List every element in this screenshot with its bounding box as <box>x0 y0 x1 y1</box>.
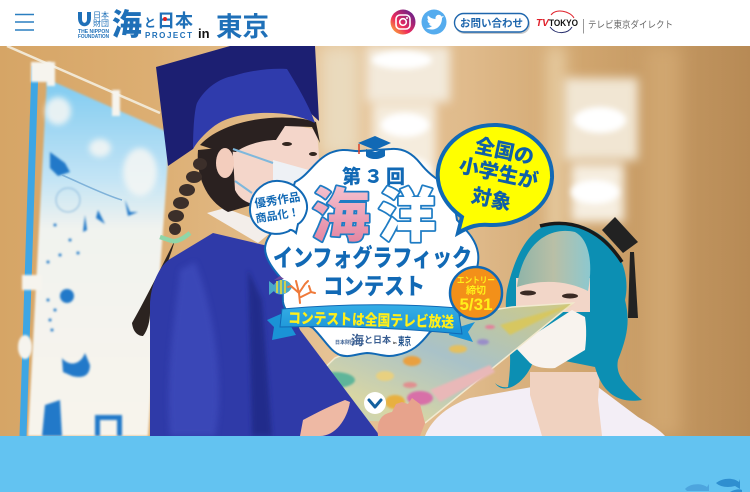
project logo <box>78 9 269 42</box>
mini project logo: 日本財団 <box>335 339 355 346</box>
bubble text line one: 優秀作品 <box>254 190 301 211</box>
icon: twitter <box>422 10 446 34</box>
contact button label: お問い合わせ <box>460 16 523 30</box>
project logo: in <box>198 26 210 41</box>
project logo: と <box>144 16 156 30</box>
blue banner on pole <box>7 46 170 436</box>
ribbon text: コンテストは全国テレビ放送 <box>288 309 454 331</box>
header bar <box>0 0 750 46</box>
mini project logo <box>335 333 411 348</box>
icon: instagram <box>390 10 416 34</box>
TV Tokyo direct label: テレビ東京ダイレクト <box>588 19 673 31</box>
main title: ocean <box>312 184 436 249</box>
lower blue band <box>0 436 750 492</box>
bubble text: elementary students: 小学生が <box>457 153 540 193</box>
deadline label two: 締切 <box>466 284 486 297</box>
icon: coral <box>288 281 315 303</box>
photo background wall <box>0 46 750 436</box>
subtitle: contest: コンテスト <box>323 273 425 299</box>
project logo: 日本 <box>93 10 109 20</box>
project logo: 日本 <box>157 11 193 31</box>
deadline label: エントリー <box>457 275 495 285</box>
bubble text line two: 商品化！ <box>255 205 300 225</box>
bubble text: nationwide: 全国の <box>473 134 536 169</box>
callout: all elementary students bubble <box>438 125 552 233</box>
entry deadline badge <box>450 267 502 319</box>
right girl with teal hair <box>425 217 665 436</box>
mini project logo: in <box>393 340 397 345</box>
main title: ocean: 洋 <box>378 184 436 249</box>
subtitle: infographic: インフォグラフィック <box>273 244 472 272</box>
project logo: 東京 <box>216 12 269 42</box>
divider <box>582 19 584 34</box>
main title: ocean: 海 <box>312 184 370 249</box>
icon: mortarboard <box>358 136 391 159</box>
TV Tokyo logo: TV <box>536 18 550 29</box>
deadline date: 5/31 <box>459 295 493 314</box>
icon: tropical fish <box>269 276 292 295</box>
ribbon: tv broadcast <box>267 305 475 342</box>
bubble text: target: 対象 <box>469 183 514 215</box>
project logo: THE NIPPON <box>78 29 109 35</box>
project logo: 財団 <box>93 18 109 28</box>
decorative fish group <box>685 479 742 492</box>
TV Tokyo logo: TOKYO <box>549 18 578 29</box>
round number heading: 第３回 <box>342 165 408 188</box>
contact button <box>454 14 530 34</box>
contest title badge <box>265 136 478 356</box>
project logo: PROJECT <box>145 31 192 40</box>
TV Tokyo logo <box>536 11 578 33</box>
mini project logo: 東京 <box>398 334 411 348</box>
mini project logo: と日本 <box>364 334 391 345</box>
project logo: 海 <box>112 9 142 42</box>
contest artwork board <box>254 303 573 435</box>
scroll down button <box>364 392 386 414</box>
callout: product award bubble <box>250 181 307 234</box>
left girl in graduation gown <box>132 46 425 436</box>
mini project logo: 海 <box>351 333 364 348</box>
project logo: FOUNDATION <box>78 34 109 40</box>
icon: hamburger menu <box>15 14 34 30</box>
